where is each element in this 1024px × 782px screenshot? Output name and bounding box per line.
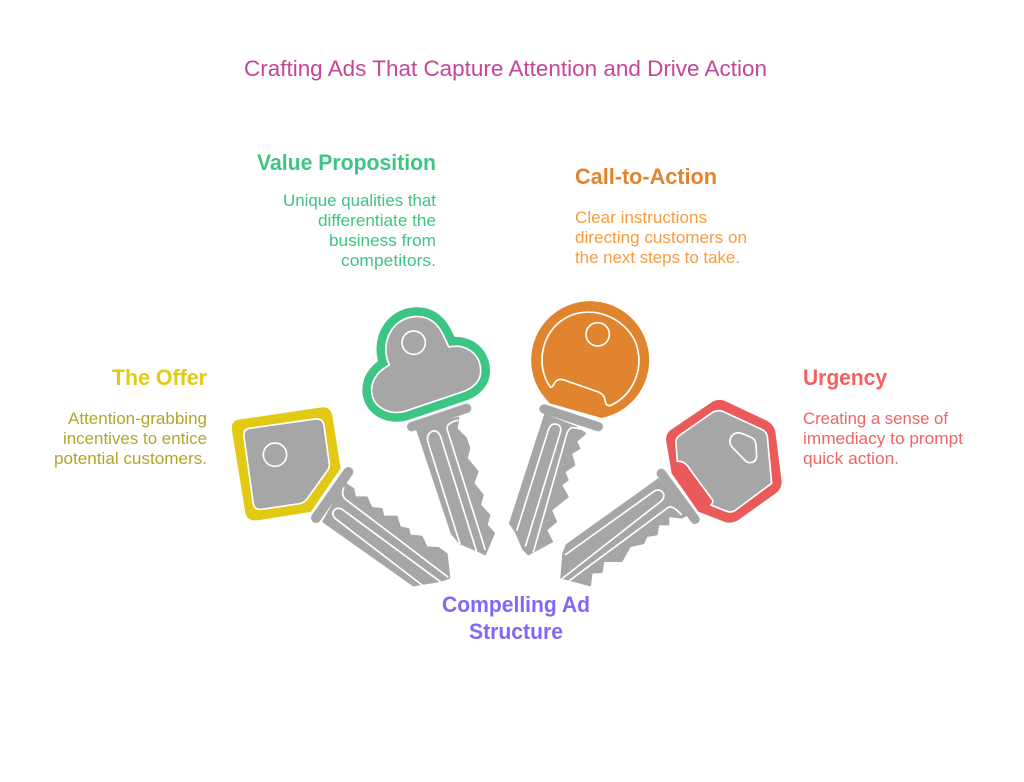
icon: orange key bbox=[510, 301, 649, 554]
text block: Value Proposition: Unique qualities that bbox=[283, 191, 436, 210]
text block: Value Proposition bbox=[257, 150, 436, 270]
text block: The Offer bbox=[54, 365, 207, 468]
text block: Urgency: immediacy to prompt bbox=[803, 429, 963, 448]
text block: Value Proposition: differentiate the bbox=[318, 211, 436, 230]
text block: The Offer: Attention-grabbing bbox=[68, 409, 207, 428]
center label bbox=[442, 592, 590, 644]
text block: Call-to-Action: the next steps to take. bbox=[575, 248, 740, 267]
text block: Call-to-Action: Call-to-Action bbox=[575, 164, 717, 189]
text block: The Offer: potential customers. bbox=[54, 449, 207, 468]
text block: Call-to-Action bbox=[575, 164, 747, 267]
text block: Value Proposition: Value Proposition bbox=[257, 150, 436, 175]
text block: Urgency: Urgency bbox=[803, 365, 888, 390]
center label: Structure bbox=[469, 619, 563, 644]
title: Crafting Ads That Capture Attention and Drive Action bbox=[244, 56, 767, 81]
icon: yellow key bbox=[232, 407, 449, 586]
text block: Call-to-Action: Clear instructions bbox=[575, 208, 707, 227]
text block: Urgency: quick action. bbox=[803, 449, 899, 468]
icon: green key bbox=[372, 317, 494, 554]
text block: The Offer: incentives to entice bbox=[63, 429, 207, 448]
text block: Urgency bbox=[803, 365, 963, 468]
text block: Urgency: Creating a sense of bbox=[803, 409, 948, 428]
text block: Value Proposition: competitors. bbox=[341, 251, 436, 270]
text block: Call-to-Action: directing customers on bbox=[575, 228, 747, 247]
text block: Value Proposition: business from bbox=[329, 231, 436, 250]
center label: Compelling Ad bbox=[442, 592, 590, 617]
text block: The Offer: The Offer bbox=[112, 365, 207, 390]
icon: red key bbox=[561, 400, 782, 585]
